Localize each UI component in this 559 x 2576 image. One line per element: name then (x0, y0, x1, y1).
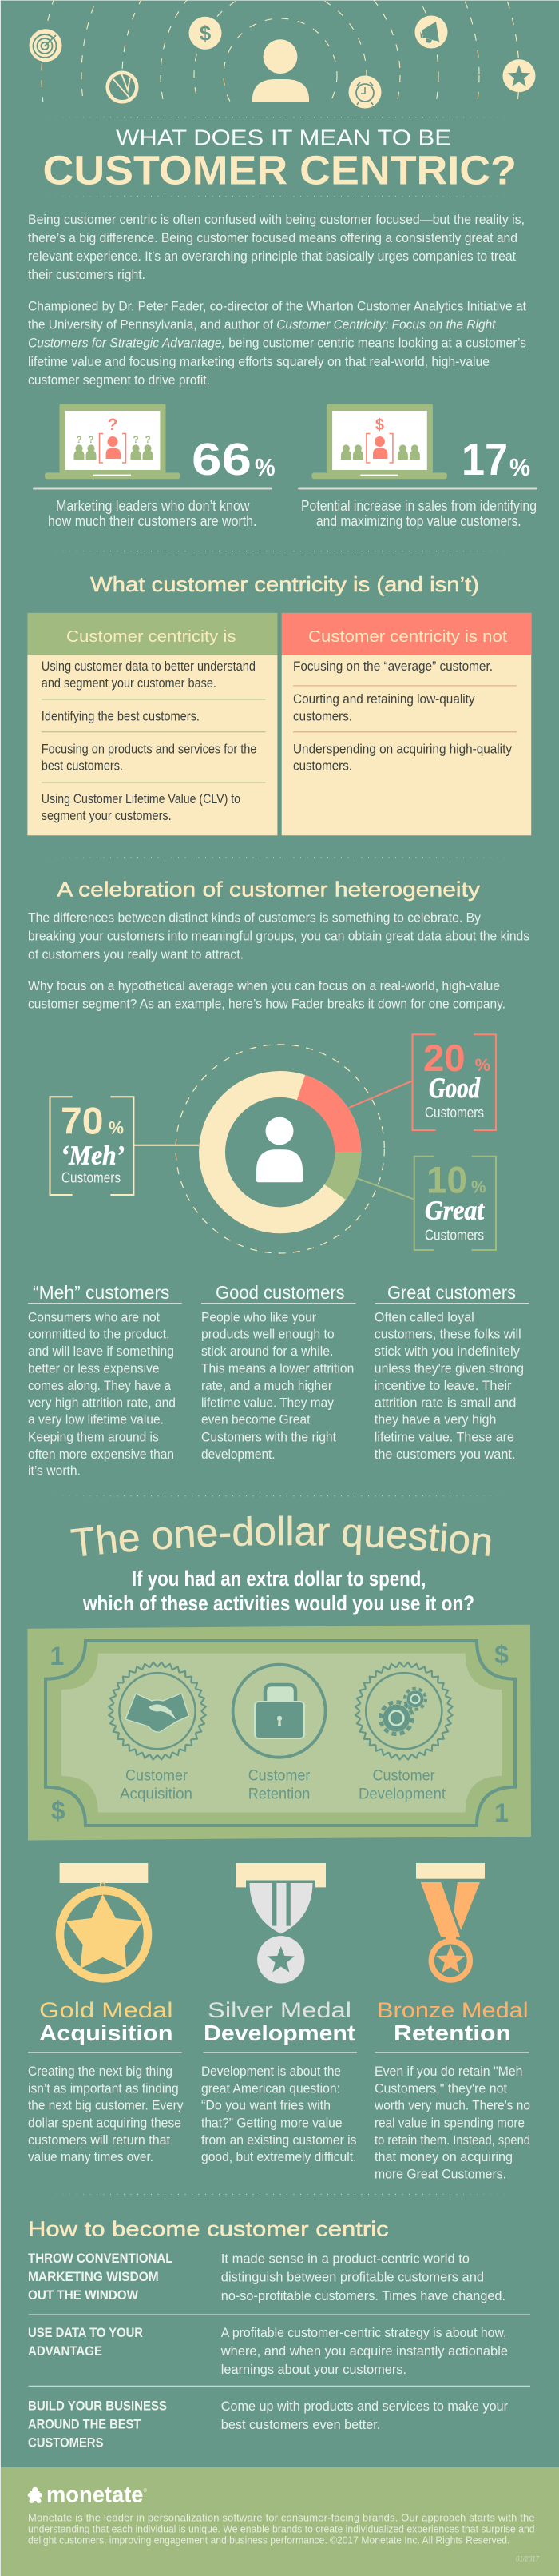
column: silver medal development: that?” Getting more value (201, 2116, 343, 2131)
column: great customers: they have a very high (375, 1412, 496, 1427)
icon: laptop with question marks: ? (108, 416, 117, 434)
stat: 17%: and maximizing top value customers. (316, 513, 521, 529)
panel: customer centricity is: best customers. (42, 758, 123, 774)
column: meh customers: and will leave if something (28, 1344, 174, 1359)
column: great customers: Often called loyal (375, 1309, 474, 1324)
logo: monetate: monetate (46, 2482, 144, 2506)
bill labels: Customer (248, 1768, 311, 1784)
heading: what customer centricity is: What customer centricity is (and isn’t) (90, 572, 479, 596)
footer text: understanding that each individual is unique. We enable brands to create individualized experiences that surprise and (28, 2522, 535, 2535)
heading: how to become customer centric: How to become customer centric (28, 2217, 389, 2241)
column: good customers: development. (201, 1447, 276, 1462)
callout: 70% meh: % (109, 1117, 124, 1137)
icon: laptop with question marks: ? (76, 434, 82, 445)
stat: 66%: how much their customers are worth. (48, 513, 257, 529)
callout: 20% good: % (475, 1055, 490, 1075)
column: silver medal development: Silver Medal (208, 1998, 351, 2022)
heterogeneity text: of customers you really want to attract. (28, 947, 244, 962)
icon: person (252, 39, 309, 102)
stat: 17% (298, 404, 537, 529)
stat: 17%: 17 (462, 434, 508, 485)
icon: person (256, 1117, 303, 1182)
column: great customers: unless they're given strong (375, 1360, 524, 1376)
column: great customers (375, 1282, 529, 1462)
column: good customers (201, 1282, 356, 1462)
column: good customers: This means a lower attrition (201, 1360, 354, 1376)
callout: 10% great: % (471, 1177, 486, 1196)
column: great customers: attrition rate is small and (375, 1395, 516, 1410)
column: good customers: even become Great (201, 1412, 311, 1427)
intro paragraph 2: Customers for Strategic Advantage, being customer centric means looking at a customer’s (28, 336, 526, 351)
column: silver medal development: great American question: (201, 2081, 340, 2096)
icon: dollar coin: $ (200, 21, 212, 45)
step 1: OUT THE WINDOW (28, 2287, 139, 2303)
column: meh customers: “Meh” customers (33, 1282, 169, 1303)
column: good customers: lifetime value. They may (201, 1395, 334, 1410)
dollar bill (27, 1625, 531, 1840)
column: gold medal acquisition: isn’t as important as finding (28, 2081, 179, 2096)
step 1: MARKETING WISDOM (28, 2269, 159, 2284)
step 3: AROUND THE BEST (28, 2417, 141, 2432)
column: meh customers: often more expensive than (28, 1447, 174, 1462)
column: bronze medal retention: Bronze Medal (377, 1998, 529, 2022)
icon: alarm clock (348, 75, 382, 109)
hero illustration (29, 0, 535, 109)
column: bronze medal retention (374, 1998, 530, 2182)
column: great customers: lifetime value. These are (375, 1429, 514, 1444)
donut chart (176, 1045, 384, 1253)
callout: 70% meh: ‘Meh’ (61, 1141, 125, 1171)
panel: customer centricity is: Using Customer Lifetime Value (CLV) to (42, 791, 240, 806)
column: great customers: stick with you indefinitely (375, 1344, 520, 1359)
step 3: CUSTOMERS (28, 2435, 104, 2451)
bill labels: Retention (248, 1786, 310, 1803)
bill corner marks (50, 1640, 509, 1827)
column: bronze medal retention: real value in spending more (375, 2116, 525, 2131)
column: gold medal acquisition: customers will return that (28, 2132, 170, 2148)
bill corner marks: 1 (494, 1798, 509, 1827)
step 3: best customers even better. (221, 2417, 380, 2432)
icon: target (29, 29, 62, 62)
step 1: It made sense in a product-centric world to (221, 2252, 470, 2267)
subheading: extra dollar question: If you had an extra dollar to spend, (132, 1567, 426, 1591)
column: bronze medal retention: more Great Customers. (375, 2166, 506, 2182)
icon: star (503, 59, 535, 92)
title: CUSTOMER CENTRIC? (43, 148, 517, 193)
bill corner marks: $ (494, 1640, 509, 1669)
panel: customer centricity is not: customers. (293, 708, 352, 723)
icon: pie chart (108, 73, 137, 102)
intro paragraph 2: Championed by Dr. Peter Fader, co-director of the Wharton Customer Analytics Initiative at (28, 298, 526, 313)
icon: padlock badge (233, 1665, 326, 1758)
callout: 10% great: Great (425, 1196, 485, 1226)
column: great customers: incentive to leave. Their (375, 1378, 512, 1393)
step 2 (28, 2325, 508, 2377)
column: meh customers: comes along. They have a (28, 1378, 171, 1393)
intro paragraph 2 (28, 298, 526, 388)
heterogeneity text (28, 910, 529, 1012)
bill labels: Acquisition (120, 1786, 192, 1803)
panel: customer centricity is not: Focusing on the “average” customer. (293, 659, 493, 674)
icon: laptop with question marks: ? (145, 434, 151, 445)
step 1 (28, 2251, 505, 2303)
column: meh customers: it’s worth. (28, 1463, 81, 1479)
logo: monetate: ® (144, 2488, 147, 2494)
column: silver medal development (201, 1998, 357, 2164)
column: bronze medal retention: Customers," they're not (375, 2081, 507, 2096)
column: meh customers: better or less expensive (28, 1360, 160, 1376)
column: gold medal acquisition: the next big customer. Every (28, 2098, 184, 2113)
column: meh customers: Keeping them around is (28, 1429, 159, 1444)
icon: laptop with question marks: ? (88, 434, 94, 445)
column: silver medal development: from an existing customer is (201, 2132, 356, 2148)
step 1: no-so-profitable customers. Times have changed. (221, 2288, 505, 2303)
callout: 70% meh: Customers (61, 1169, 121, 1185)
panel: customer centricity is: Customer centricity is (66, 628, 236, 646)
step 1: distinguish between profitable customers and (221, 2270, 484, 2285)
panel: customer centricity is: Focusing on products and services for the (42, 742, 256, 756)
dashed orbit arcs (42, 0, 519, 102)
intro paragraph 2: the University of Pennsylvania, and author of Customer Centricity: Focus on the Right (28, 317, 497, 332)
callout: 10% great (357, 1157, 496, 1250)
step 3 (28, 2399, 508, 2451)
column: great customers: customers, these folks will (375, 1326, 521, 1341)
column: gold medal acquisition: Gold Medal (39, 1998, 172, 2022)
panel: customer centricity is not: Underspending on acquiring high-quality (293, 742, 512, 756)
stat: 66% (33, 404, 276, 529)
footer text (28, 2512, 535, 2546)
callout: 20% good: Good (429, 1072, 481, 1104)
intro paragraph 1: their customers right. (28, 267, 145, 282)
stat: 17%: % (509, 453, 530, 481)
column: meh customers: very high attrition rate, and (28, 1395, 176, 1410)
panel: customer centricity is: Using customer data to better understand (42, 659, 256, 674)
column: good customers: Good customers (216, 1282, 345, 1303)
column: meh customers: committed to the product, (28, 1326, 169, 1341)
callout: 20% good: 20 (423, 1037, 466, 1079)
medal: bronze (416, 1863, 485, 1980)
date stamp: 01/2017 (516, 2555, 540, 2563)
icon: handshake badge (89, 1652, 212, 1782)
column: great customers: the customers you want. (375, 1447, 516, 1462)
intro paragraph 2: customer segment to drive profit. (28, 372, 210, 388)
panel: customer centricity is: and segment your customer base. (42, 675, 216, 691)
column: great customers: Great customers (387, 1282, 516, 1303)
icon: megaphone (415, 16, 447, 48)
callout: 70% meh (50, 1097, 199, 1195)
stat: 66%: 66 (192, 434, 252, 485)
icon: gears badge (335, 1652, 458, 1782)
title (43, 125, 517, 193)
callout: 70% meh: 70 (61, 1099, 104, 1141)
column: bronze medal retention: that money on acquiring (375, 2149, 513, 2164)
step 2: where, and when you acquire instantly actionable (220, 2343, 508, 2359)
panel: customer centricity is: Identifying the best customers. (42, 708, 200, 723)
column: good customers: stick around for a while. (201, 1344, 333, 1359)
step 3: BUILD YOUR BUSINESS (28, 2399, 167, 2414)
intro paragraph 1: relevant experience. It’s an overarching principle that basically urges companies to treat (28, 249, 516, 264)
title: WHAT DOES IT MEAN TO BE (116, 125, 451, 150)
column: bronze medal retention: to retain them. Instead, spend (375, 2132, 530, 2148)
column: good customers: rate, and a much higher (201, 1378, 332, 1393)
heading: the one-dollar question: The one-dollar question (70, 1515, 490, 1556)
intro paragraph 1 (28, 212, 525, 282)
column: gold medal acquisition: value many times over. (28, 2149, 153, 2164)
heterogeneity text: The differences between distinct kinds of customers is something to celebrate. By (28, 910, 481, 925)
step 2: ADVANTAGE (28, 2343, 102, 2359)
subheading: extra dollar question: which of these activities would you use it on? (82, 1591, 474, 1615)
stat: 66%: % (255, 453, 276, 481)
panel: customer centricity is not: Courting and retaining low-quality (293, 691, 475, 707)
panel: customer centricity is not (282, 613, 532, 835)
panel: customer centricity is: segment your customers. (42, 808, 172, 823)
bill labels: Customer (372, 1768, 435, 1784)
bill labels: Customer (125, 1768, 188, 1784)
column: gold medal acquisition: Creating the next big thing (28, 2064, 172, 2079)
column: good customers: products well enough to (201, 1326, 335, 1341)
step 2: USE DATA TO YOUR (28, 2325, 143, 2340)
icon: laptop with question marks: ? (133, 434, 139, 445)
panel: customer centricity is (27, 613, 277, 835)
column: gold medal acquisition: Acquisition (39, 2021, 172, 2045)
medal: gold (60, 1863, 148, 1978)
icon: dollar coin (188, 17, 222, 50)
heterogeneity text: customer segment? As an example, here’s how Fader breaks it down for one company. (28, 997, 505, 1012)
column: meh customers (28, 1282, 182, 1479)
icon: laptop with dollar sign: $ (375, 416, 384, 434)
panel: customer centricity is not: customers. (293, 758, 352, 774)
column: good customers: Customers with the right (201, 1429, 336, 1444)
bill labels (120, 1768, 446, 1803)
heterogeneity text: breaking your customers into meaningful groups, you can obtain great data about the kinds (28, 928, 529, 943)
callout: 10% great: 10 (426, 1158, 467, 1200)
callout: 20% good: Customers (425, 1105, 484, 1121)
heading: celebration of heterogeneity: A celebration of customer heterogeneity (57, 878, 480, 902)
callout: 20% good (349, 1034, 496, 1130)
column: meh customers: a very low lifetime value. (28, 1412, 164, 1427)
column: bronze medal retention: Even if you do retain "Meh (375, 2064, 522, 2079)
footer text: Monetate is the leader in personalization software for consumer-facing brands. Our approach starts with the (28, 2512, 535, 2524)
medal: silver (236, 1863, 326, 1984)
step 3: Come up with products and services to make your (221, 2399, 508, 2414)
heterogeneity text: Why focus on a hypothetical average when you can focus on a real-world, high-value (28, 978, 500, 993)
column: silver medal development: Development (204, 2021, 355, 2045)
subheading: extra dollar question (82, 1567, 474, 1615)
intro paragraph 2: lifetime value and focusing marketing efforts squarely on that real-world, high-value (28, 354, 490, 369)
step 2: A profitable customer-centric strategy is about how, (221, 2325, 506, 2340)
column: gold medal acquisition (28, 1998, 184, 2164)
column: good customers: People who like your (201, 1309, 316, 1324)
step 2: learnings about your customers. (221, 2362, 406, 2377)
column: gold medal acquisition: dollar spent acquiring these (28, 2116, 181, 2131)
footer (1, 2467, 559, 2576)
icon: laptop with question marks (45, 404, 180, 479)
column: silver medal development: good, but extremely difficult. (201, 2149, 356, 2164)
step 1: THROW CONVENTIONAL (28, 2251, 172, 2266)
column: meh customers: Consumers who are not (28, 1309, 160, 1324)
intro paragraph 1: there’s a big difference. Being customer focused means offering a consistently great and (28, 230, 517, 245)
column: bronze medal retention: Retention (394, 2021, 511, 2045)
column: bronze medal retention: worth very much. There's no (374, 2098, 530, 2113)
callout: 10% great: Customers (425, 1228, 484, 1244)
icon: laptop with dollar sign (311, 404, 447, 479)
bill corner marks: $ (51, 1796, 65, 1825)
bill corner marks: 1 (50, 1642, 64, 1670)
stat: 66%: Marketing leaders who don’t know (56, 498, 250, 514)
bill labels: Development (359, 1786, 446, 1803)
panel: customer centricity is not: Customer centricity is not (308, 628, 507, 646)
intro paragraph 1: Being customer centric is often confused with being customer focused—but the reality is, (28, 212, 525, 227)
column: silver medal development: “Do you want fries with (201, 2098, 331, 2113)
footer text: delight customers, improving engagement and business performance. ©2017 Monetate Inc. All Rights Reserved. (28, 2534, 509, 2546)
column: silver medal development: Development is about the (201, 2064, 341, 2079)
